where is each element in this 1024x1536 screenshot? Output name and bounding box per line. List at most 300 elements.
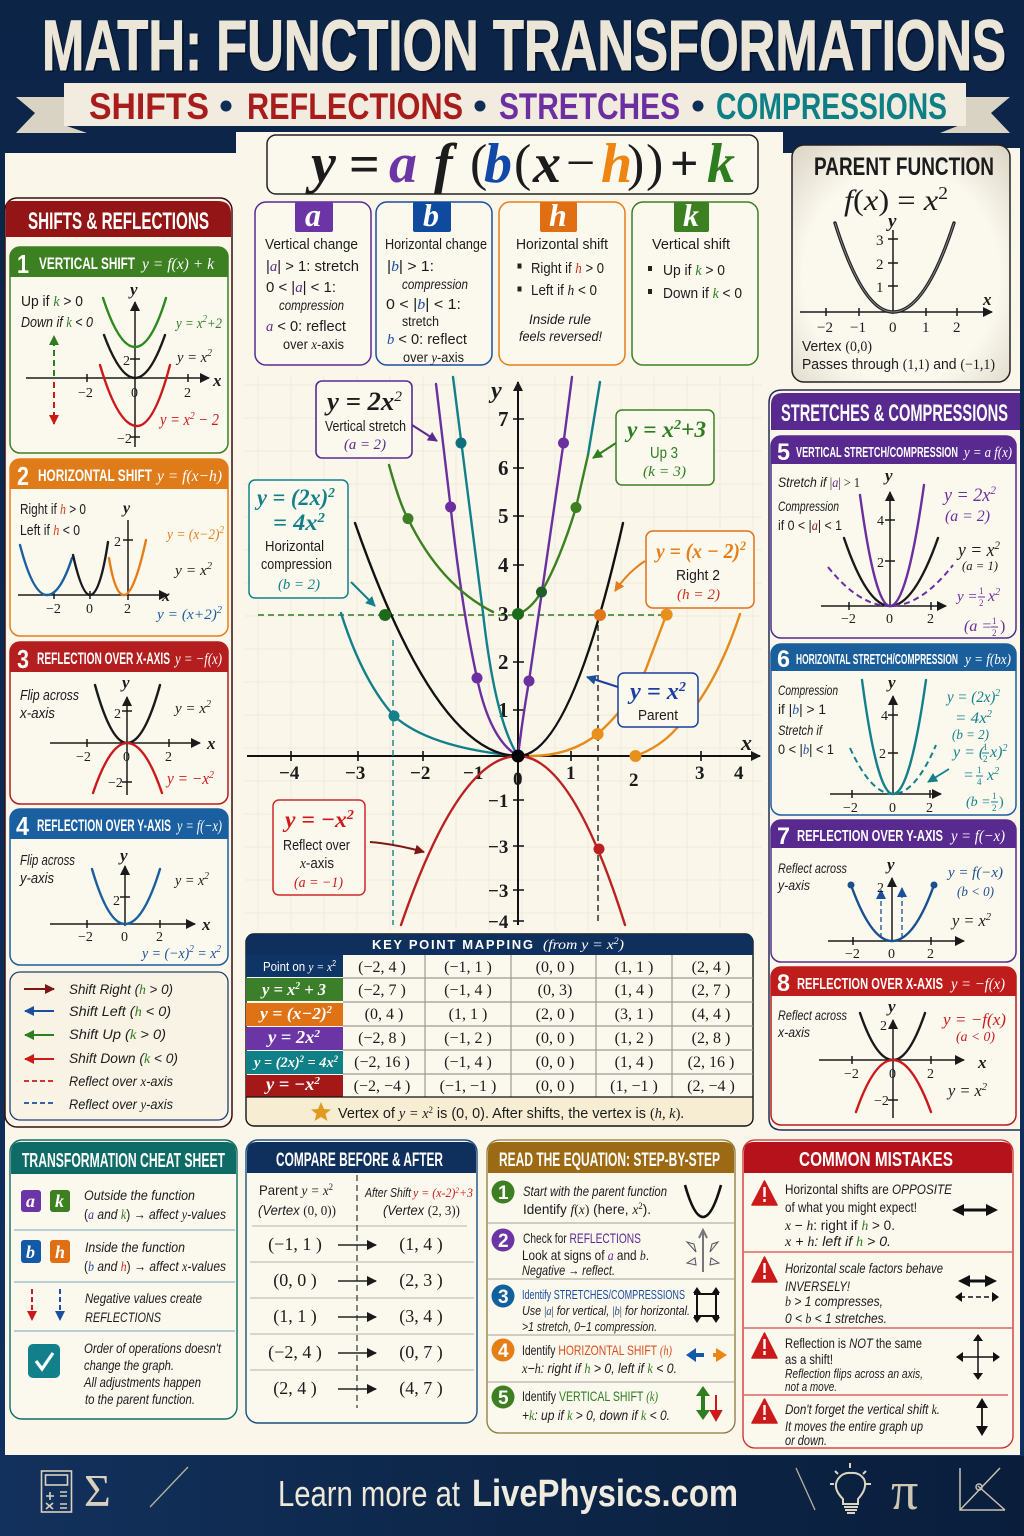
chart: vertical stretch: 2 bbox=[990, 483, 996, 497]
card 7: reflection over y-axis: Reflect across bbox=[778, 860, 847, 876]
heading: cheat sheet bbox=[11, 1142, 236, 1174]
panel: parent function: Vertex (0,0) bbox=[802, 338, 872, 355]
chart: parent parabola: 3 bbox=[876, 233, 884, 249]
chart: horizontal shift: 0 bbox=[86, 602, 93, 617]
axes: −4 bbox=[488, 912, 509, 933]
chart: reflection x: 0 bbox=[123, 750, 130, 765]
heading: common mistakes: COMMON MISTAKES bbox=[799, 1149, 953, 1171]
label: y = half x squared bbox=[955, 586, 1000, 608]
chart: vertical shift: 2 bbox=[123, 354, 130, 369]
card 4: reflection over y-axis bbox=[10, 809, 228, 965]
axes: 3 bbox=[695, 763, 704, 784]
coefficient k card: Up if k > 0 bbox=[663, 262, 725, 279]
row labels: y = x bbox=[262, 980, 296, 999]
table values: (2, 16 ) bbox=[688, 1054, 734, 1071]
card 7: reflection over y-axis bbox=[771, 820, 1016, 962]
callout: y = (2x)^2: (b = 2) bbox=[278, 577, 320, 593]
panel: transformation cheat sheet: Outside the function bbox=[84, 1187, 195, 1203]
curve: teal narrow bbox=[453, 377, 600, 756]
callout: y = (x-2)^2 bbox=[646, 531, 754, 608]
callout: parent bbox=[618, 673, 698, 727]
card 8: reflection over x-axis bbox=[771, 967, 1016, 1125]
label: y = half x squared: y = bbox=[955, 589, 978, 605]
card 7: reflection over y-axis: 7 bbox=[777, 823, 790, 850]
chart: vertical stretch: y = x bbox=[958, 540, 997, 561]
chart: parent parabola bbox=[800, 211, 992, 336]
arrow: shift right bbox=[24, 988, 54, 990]
step 3: Identify STRETCHES/COMPRESSIONS bbox=[522, 1287, 685, 1302]
label: = quarter x squared: = bbox=[963, 767, 974, 784]
mistake 3: not a move. bbox=[785, 1379, 837, 1394]
panel: transformation cheat sheet: (a and k) → affect y-values bbox=[84, 1206, 226, 1223]
card 3: reflection over x-axis: REFLECTION OVER X-AXIS bbox=[37, 649, 170, 668]
subtitle ribbon bbox=[16, 83, 1010, 133]
row values: (2, 4 ) bbox=[273, 1378, 317, 1399]
card 6: horizontal stretch bbox=[771, 644, 1016, 816]
callout: y = x^2 + 3: +3 bbox=[681, 417, 706, 442]
mistake 1: x − h: right if h > 0. bbox=[784, 1217, 895, 1234]
callout: parent: Parent bbox=[638, 707, 679, 724]
panel: transformation cheat sheet: Inside the function bbox=[85, 1239, 185, 1255]
label: y = (half x) squared: 2 bbox=[983, 754, 988, 764]
chart: reflection y: 2 bbox=[156, 930, 163, 945]
panel: compare before and after: (Vertex (2, 3)) bbox=[383, 1202, 460, 1219]
label: y = (half x) squared: y = ( bbox=[951, 744, 986, 761]
chart: parent parabola: y bbox=[886, 211, 897, 232]
subtitle ribbon: REFLECTIONS bbox=[247, 86, 463, 127]
tab a: a bbox=[305, 197, 321, 233]
chart: parent parabola: 0 bbox=[889, 320, 896, 336]
chart: vertical stretch: −2 bbox=[841, 612, 856, 627]
dashed: reflect x bbox=[24, 1080, 55, 1082]
axes: 1 bbox=[566, 763, 576, 784]
axes: 6 bbox=[498, 456, 508, 480]
chart: horizontal shift: y = x bbox=[175, 563, 206, 579]
label: y = (half x) squared: x) bbox=[990, 744, 1002, 761]
icon: dashed down arrows bbox=[32, 1289, 60, 1320]
legend: Reflect over y-axis bbox=[69, 1096, 173, 1113]
tab b: b bbox=[423, 197, 439, 233]
dashed guides bbox=[258, 615, 666, 925]
table values: (−1, 2 ) bbox=[444, 1030, 492, 1047]
axes: 5 bbox=[498, 504, 508, 528]
chart: reflection y: 0 bbox=[888, 947, 895, 962]
key points bbox=[379, 438, 673, 854]
chart: reflection y bbox=[828, 855, 1003, 962]
chart: reflection x bbox=[50, 673, 216, 795]
callout: y = -x^2: x-axis bbox=[299, 855, 334, 872]
curve: y = (2x)^2 wide teal bbox=[341, 613, 518, 756]
card 4: reflection over y-axis: y = f(−x) bbox=[175, 818, 222, 835]
coefficient a card: compression bbox=[279, 297, 344, 313]
table values: (2, 7 ) bbox=[692, 982, 730, 999]
badges a k: a bbox=[26, 1191, 35, 1211]
table values: (0, 0 ) bbox=[536, 959, 574, 976]
callout: y = (x-2)^2: (h = 2) bbox=[677, 587, 720, 603]
label: y = (half x) squared: 2 bbox=[1002, 743, 1007, 754]
heading: shifts and reflections bbox=[6, 201, 231, 237]
card 3: reflection over x-axis: Flip across bbox=[20, 687, 79, 704]
label: b = half: (b = bbox=[966, 795, 991, 810]
panel: stretches and compressions bbox=[769, 390, 1020, 1130]
chart: vertical shift: 2 bbox=[207, 348, 212, 359]
callout: y = x^2 + 3 bbox=[616, 410, 714, 485]
card 5: vertical stretch: y = a f(x) bbox=[962, 445, 1012, 461]
card 5: vertical stretch: if 0 < |a| < 1 bbox=[778, 517, 842, 534]
coefficient a card: |a| > 1: stretch bbox=[266, 258, 359, 275]
mistake 1: x + h: left if h > 0. bbox=[784, 1233, 891, 1250]
row labels: y = (x−2) bbox=[260, 1004, 324, 1023]
coefficient k card: Down if k < 0 bbox=[663, 285, 742, 302]
table values bbox=[354, 959, 735, 1095]
label: a = half: (a = bbox=[964, 618, 992, 635]
card 5: vertical stretch: Compression bbox=[778, 498, 839, 514]
chart: horizontal shift: 2 bbox=[124, 602, 131, 617]
card 2: horizontal shift: 2 bbox=[17, 461, 29, 491]
axes: 0 bbox=[513, 769, 522, 790]
chart: reflection x: (a < 0) bbox=[956, 1030, 995, 1045]
main formula box: ) bbox=[646, 135, 663, 192]
chart: reflection x: −2 bbox=[76, 750, 91, 765]
card 6: horizontal stretch: y = f(bx) bbox=[963, 652, 1011, 668]
table values: (2, 8 ) bbox=[692, 1030, 730, 1047]
axes: x bbox=[740, 730, 752, 755]
badges a k: k bbox=[55, 1191, 64, 1211]
coefficient k card: Vertical shift bbox=[652, 236, 731, 253]
chart: reflection x: y = x bbox=[175, 701, 206, 717]
axes: 4 bbox=[498, 553, 509, 577]
callout: y = 2x^2: (a = 2) bbox=[344, 437, 386, 453]
chart: reflection y: = x bbox=[194, 946, 217, 962]
label: y = half x squared: x bbox=[988, 588, 995, 605]
table values: (−1, 4 ) bbox=[444, 982, 492, 999]
chart: vertical shift: 0 bbox=[131, 386, 138, 401]
label: y = half x squared: 1 bbox=[979, 586, 984, 596]
table footer note bbox=[247, 1097, 752, 1125]
step 1: 1 bbox=[498, 1183, 509, 1204]
table footer note: is (0, 0). After shifts, the vertex is bbox=[433, 1105, 650, 1122]
step 3: Use |a| for vertical, |b| for horizontal. bbox=[522, 1303, 690, 1318]
heading: read the equation: READ THE EQUATION: STEP-BY-STEP bbox=[499, 1150, 720, 1171]
main formula box: ) bbox=[627, 135, 644, 192]
tab b bbox=[413, 197, 451, 233]
row labels bbox=[246, 955, 343, 1097]
label: y = half x squared: 2 bbox=[979, 598, 984, 608]
callout: y = -x^2: y = −x bbox=[285, 807, 345, 832]
icon: calculator bbox=[42, 1471, 72, 1512]
chart: vertical shift: +2 bbox=[207, 316, 222, 332]
panel: read the equation bbox=[487, 1140, 735, 1433]
legend: Shift Right (h > 0) bbox=[69, 981, 173, 998]
chart: reflection y: 2 bbox=[113, 894, 120, 909]
step 2: Negative → reflect. bbox=[522, 1262, 615, 1278]
chart: reflection x: 0 bbox=[889, 1067, 896, 1082]
axes: −3 bbox=[488, 881, 508, 902]
chart: vertical shift: y = x bbox=[160, 410, 195, 429]
table values: (−2, 16 ) bbox=[354, 1054, 410, 1071]
chart: reflection y: (b < 0) bbox=[957, 885, 994, 900]
coefficient h card: Left if h < 0 bbox=[531, 282, 597, 299]
heading: compare: COMPARE BEFORE & AFTER bbox=[276, 1150, 443, 1171]
subtitle ribbon: SHIFTS bbox=[89, 86, 209, 127]
card 4: reflection over y-axis: 4 bbox=[16, 811, 29, 841]
card 1: vertical shift: 1 bbox=[17, 249, 29, 279]
chart: vertical shift: − 2 bbox=[195, 410, 219, 429]
tab h bbox=[540, 197, 577, 233]
step 4 bbox=[492, 1338, 727, 1377]
main formula box: a bbox=[389, 133, 417, 195]
chart: reflection x: −2 bbox=[108, 776, 123, 791]
panel: transformation cheat sheet: REFLECTIONS bbox=[85, 1309, 162, 1325]
formula: f(x)=x²: f(x) = x bbox=[844, 184, 937, 217]
main formula box: ( bbox=[514, 135, 531, 192]
table values: (1, 4 ) bbox=[615, 982, 653, 999]
tab h: h bbox=[549, 197, 567, 233]
badges b h bbox=[21, 1240, 70, 1263]
heading: cheat sheet: TRANSFORMATION CHEAT SHEET bbox=[22, 1150, 225, 1172]
callout: parent: y = x bbox=[630, 679, 678, 705]
row values bbox=[268, 1234, 443, 1399]
icon: pi: π bbox=[891, 1461, 918, 1521]
axes: 2 bbox=[498, 650, 508, 674]
chart: reflection x: 2 bbox=[982, 1081, 987, 1093]
step 5 bbox=[492, 1386, 721, 1424]
chart: reflection y: 2 bbox=[189, 944, 194, 955]
card 5: vertical stretch: Stretch if |a| > 1 bbox=[778, 474, 860, 491]
legend bbox=[10, 972, 228, 1120]
card 2: horizontal shift bbox=[10, 459, 228, 636]
card 7: reflection over y-axis: REFLECTION OVER Y-AXIS bbox=[797, 828, 943, 845]
row values: (1, 1 ) bbox=[273, 1306, 317, 1327]
main formula box: ( bbox=[470, 135, 487, 192]
card 1: vertical shift: y = f(x) + k bbox=[140, 256, 215, 273]
mistake 2: 0 < b < 1 stretches. bbox=[785, 1310, 887, 1327]
chart: reflection y: 2 bbox=[204, 871, 209, 882]
card 8: reflection over x-axis: y = −f(x) bbox=[949, 976, 1005, 993]
chart: parent parabola: 1 bbox=[922, 320, 930, 336]
row arrows bbox=[338, 1245, 376, 1389]
coefficient a card: 0 < |a| < 1: bbox=[266, 279, 336, 296]
axes: 1 bbox=[498, 698, 508, 722]
coefficient h card: Right if h > 0 bbox=[531, 260, 604, 277]
table values: (1, −1 ) bbox=[610, 1078, 658, 1095]
row labels: 2 bbox=[313, 1028, 321, 1040]
arrow: shift left bbox=[25, 1010, 54, 1012]
step 4: Identify HORIZONTAL SHIFT (h) bbox=[522, 1342, 672, 1359]
chart: horizontal stretch: 0 bbox=[889, 801, 896, 816]
chart: reflection y: 2 bbox=[216, 944, 221, 955]
chart: parent parabola: −2 bbox=[817, 320, 833, 336]
callout: y = 2x^2: y = 2x bbox=[327, 387, 392, 416]
row values: (0, 0 ) bbox=[273, 1270, 317, 1291]
row values: (3, 4 ) bbox=[399, 1306, 443, 1327]
label: a = half bbox=[964, 616, 1005, 638]
label: y = half x squared: 2 bbox=[995, 587, 1000, 598]
table values: (−1, −1 ) bbox=[440, 1078, 496, 1095]
axes: −2 bbox=[410, 763, 430, 784]
card 3: reflection over x-axis: x-axis bbox=[19, 705, 55, 722]
chart: horizontal shift: x bbox=[161, 588, 170, 605]
chart: vertical stretch: (a = 1) bbox=[962, 558, 998, 573]
chart: reflection y: −2 bbox=[78, 930, 93, 945]
tab k bbox=[674, 197, 709, 233]
callout: y = 2x^2: 2 bbox=[394, 389, 403, 405]
curve: y = -x^2 bbox=[401, 756, 625, 925]
chart: reflection x: −2 bbox=[874, 1094, 889, 1109]
step 1: 2 bbox=[638, 1201, 643, 1211]
callout: y = x^2 + 3: 2 bbox=[673, 418, 681, 433]
chart: horizontal stretch: (b = 2) bbox=[952, 728, 989, 743]
row labels: 2 bbox=[332, 959, 336, 968]
curve: y = x^2 bbox=[355, 523, 623, 756]
table header: KEY POINT MAPPING bbox=[372, 937, 535, 952]
table values: (−2, 7 ) bbox=[358, 982, 406, 999]
main formula box: x bbox=[532, 133, 561, 195]
coefficient a card: over x-axis bbox=[283, 336, 344, 353]
card 8: reflection over x-axis: REFLECTION OVER X-AXIS bbox=[797, 976, 943, 993]
subtitle ribbon: STRETCHES bbox=[499, 86, 680, 127]
callout: y = -x^2: (a = −1) bbox=[294, 875, 343, 891]
chart: vertical shift: y bbox=[128, 280, 138, 299]
axes: 3 bbox=[498, 602, 508, 626]
chart: reflection x: 2 bbox=[165, 750, 172, 765]
card 8: reflection over x-axis: Reflect across bbox=[778, 1007, 847, 1023]
chart: horizontal stretch: 2 bbox=[879, 747, 886, 762]
panel: compare before and after: 2 bbox=[455, 1186, 459, 1195]
chart: horizontal stretch: y = (2x) bbox=[947, 689, 999, 706]
chart: horizontal shift: 2 bbox=[114, 535, 121, 550]
chart: vertical shift: 2 bbox=[190, 410, 195, 422]
mistake 2: b > 1 compresses, bbox=[785, 1293, 883, 1310]
badges b h: b bbox=[26, 1242, 35, 1262]
table values: (4, 4 ) bbox=[692, 1006, 730, 1023]
card 2: horizontal shift: Right if h > 0 bbox=[20, 501, 86, 518]
chart: reflection y: y = (−x) bbox=[142, 946, 193, 962]
step 1: Identify f(x) (here, x bbox=[523, 1201, 639, 1218]
panel: transformation cheat sheet: All adjustments happen bbox=[83, 1374, 201, 1390]
chart: horizontal stretch: −2 bbox=[843, 801, 858, 816]
coefficient b card: compression bbox=[402, 276, 468, 292]
chart: reflection y: −2 bbox=[845, 947, 860, 962]
tab a bbox=[295, 197, 333, 233]
card 3: reflection over x-axis bbox=[10, 642, 228, 804]
label: b = half: 2 bbox=[992, 803, 996, 813]
label: b = half: 1 bbox=[992, 791, 996, 801]
step 4: x−h: right if h > 0, left if k < 0. bbox=[521, 1360, 677, 1377]
step 3 bbox=[492, 1284, 720, 1334]
table values: (1, 4 ) bbox=[615, 1054, 653, 1071]
label: = quarter x squared: 2 bbox=[994, 766, 999, 777]
chart: vertical stretch: y = 2x bbox=[944, 485, 993, 506]
chart: vertical stretch: 2 bbox=[994, 538, 1000, 552]
footer band bbox=[0, 1456, 1024, 1536]
chart: reflection x: 2 bbox=[206, 699, 211, 710]
panel: compare before and after: After Shift bbox=[364, 1185, 412, 1200]
callout: y = 2x^2 bbox=[316, 381, 412, 458]
badges a k bbox=[21, 1190, 70, 1212]
card 2: horizontal shift: Left if h < 0 bbox=[20, 522, 80, 539]
footer: LivePhysics.com bbox=[472, 1473, 738, 1515]
icon: checkmark bbox=[28, 1344, 60, 1378]
dashed: reflect y bbox=[24, 1102, 55, 1104]
chart: horizontal shift bbox=[18, 500, 224, 623]
chart: reflection x: 2 bbox=[880, 1019, 887, 1034]
coefficient h card: Horizontal shift bbox=[516, 236, 609, 253]
main formula box: k bbox=[707, 133, 735, 195]
step 2: Look at signs of a and b. bbox=[522, 1247, 649, 1264]
table values: (1, 2 ) bbox=[615, 1030, 653, 1047]
chart: reflection x: y = −x bbox=[167, 769, 214, 788]
row values: (1, 4 ) bbox=[399, 1234, 443, 1255]
axes: 4 bbox=[734, 763, 744, 784]
table footer note: Vertex of y = x bbox=[338, 1105, 430, 1122]
chart: horizontal stretch: = 4x bbox=[955, 710, 985, 727]
chart: vertical shift: −2 bbox=[117, 432, 132, 447]
panel: transformation cheat sheet: (b and h) → affect x-values bbox=[84, 1258, 226, 1275]
row labels: y = 2x bbox=[268, 1027, 313, 1047]
callout: y = (2x)^2: compression bbox=[261, 556, 332, 573]
callout: y = -x^2 bbox=[273, 800, 365, 895]
table values: (2, 4 ) bbox=[692, 959, 730, 976]
chart: horizontal shift: −2 bbox=[46, 602, 61, 617]
callout: y = (2x)^2: 2 bbox=[316, 511, 325, 526]
chart: reflection x: y = x bbox=[948, 1081, 983, 1100]
label: = quarter x squared: 1 bbox=[977, 765, 982, 775]
row values: (0, 7 ) bbox=[399, 1342, 443, 1363]
heading: compare bbox=[247, 1142, 476, 1173]
label: a = half: ) bbox=[1000, 618, 1005, 635]
legend: Reflect over x-axis bbox=[69, 1073, 173, 1090]
mistake 1: of what you might expect! bbox=[785, 1199, 917, 1215]
axes: 7 bbox=[498, 407, 508, 431]
card 7: reflection over y-axis: y-axis bbox=[777, 877, 810, 893]
card 3: reflection over x-axis: y = −f(x) bbox=[173, 651, 222, 668]
row labels: 2 bbox=[313, 1075, 321, 1087]
card 5: vertical stretch bbox=[771, 436, 1016, 638]
panel: transformation cheat sheet bbox=[10, 1140, 237, 1419]
table footer note: (h, k). bbox=[650, 1106, 684, 1122]
row values: (2, 3 ) bbox=[399, 1270, 443, 1291]
label: a = half: 1 bbox=[992, 616, 996, 626]
card 1: vertical shift: Up if k > 0 bbox=[21, 293, 83, 310]
decorative slash bbox=[150, 1467, 188, 1507]
card 2: horizontal shift: HORIZONTAL SHIFT bbox=[38, 466, 152, 485]
chart: vertical stretch: y bbox=[883, 466, 893, 485]
main formula box: h bbox=[601, 133, 632, 195]
chart: horizontal shift: y = (x+2) bbox=[157, 607, 216, 623]
card 6: horizontal stretch: 0 < |b| < 1 bbox=[778, 741, 834, 758]
chart: horizontal shift: 2 bbox=[217, 605, 222, 616]
curve: y = 2x^2 bbox=[436, 377, 572, 756]
mistake 3: as a shift! bbox=[785, 1351, 833, 1367]
mistake 4 bbox=[752, 1398, 988, 1448]
axes: −3 bbox=[488, 837, 508, 858]
coefficient b card: b < 0: reflect bbox=[387, 331, 468, 348]
table header: (from y = x bbox=[543, 938, 606, 953]
step 3: 3 bbox=[498, 1287, 509, 1308]
chart: reflection y: y = x bbox=[952, 911, 987, 930]
arrow: shift up bbox=[25, 1034, 54, 1036]
chart: horizontal shift: y = (x−2) bbox=[167, 527, 226, 543]
table values: (−2, −4 ) bbox=[354, 1078, 410, 1095]
table header: 2 bbox=[614, 936, 619, 946]
main formula box: f bbox=[434, 133, 458, 195]
callout: y = (x-2)^2: 2 bbox=[739, 538, 746, 553]
row values: (4, 7 ) bbox=[399, 1378, 443, 1399]
callout: y = (x-2)^2: y = (x − 2) bbox=[656, 539, 746, 563]
label: y = (half x) squared: 1 bbox=[983, 742, 988, 752]
chart: reflection y: y bbox=[118, 846, 128, 865]
